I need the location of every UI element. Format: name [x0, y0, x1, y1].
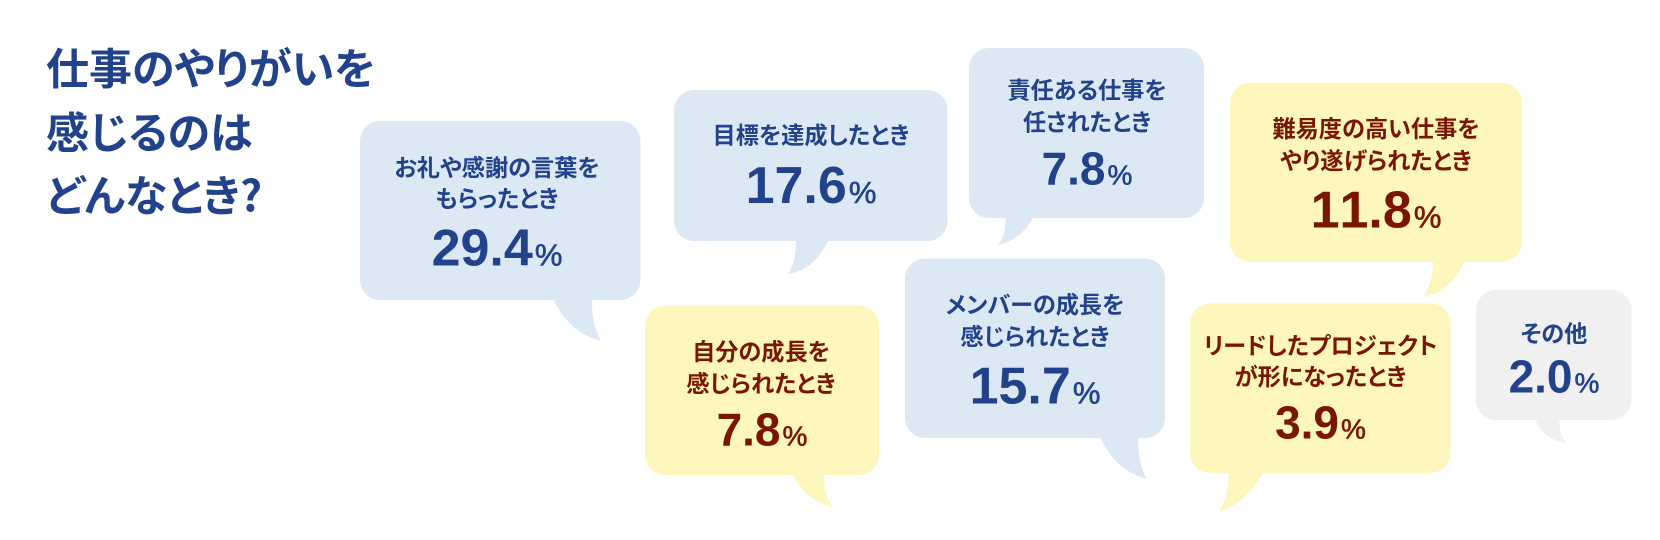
bubble: entrusted with responsibility 7.8%: 任されたとき [1023, 110, 1151, 136]
bubble: member growth 15.7% [905, 258, 1165, 479]
bubble: other 2.0% [1476, 290, 1632, 444]
bubble: thanks 29.4%: もらったとき [435, 186, 559, 212]
bubble: difficult work 11.8%: 難易度の高い仕事を [1272, 116, 1480, 142]
bubble: project took shape 3.9%: リードしたプロジェクト [1204, 333, 1437, 359]
title: どんなとき? [46, 162, 262, 224]
bubble: thanks 29.4%: 29.4% [432, 220, 562, 278]
bubble: project took shape 3.9%: が形になったとき [1235, 364, 1406, 390]
bubble: own growth 7.8% [645, 306, 879, 508]
bubble: entrusted with responsibility 7.8% [969, 48, 1204, 245]
bubble: other 2.0%: その他 [1521, 321, 1587, 347]
bubble: goal achieved 17.6% [674, 90, 948, 274]
bubble: member growth 15.7%: 15.7% [970, 358, 1100, 416]
bubble: entrusted with responsibility 7.8%: 7.8% [1042, 142, 1132, 194]
bubble: other 2.0%: 2.0% [1509, 350, 1599, 402]
bubble: thanks 29.4%: お礼や感謝の言葉を [394, 155, 600, 181]
title [46, 36, 375, 224]
bubble: entrusted with responsibility 7.8%: 責任ある仕事を [1007, 78, 1167, 104]
bubble: own growth 7.8%: 感じられたとき [686, 371, 836, 397]
bubble: goal achieved 17.6%: 目標を達成したとき [713, 122, 909, 148]
bubble: goal achieved 17.6%: 17.6% [746, 157, 876, 215]
bubble: own growth 7.8%: 7.8% [717, 404, 807, 456]
bubble: difficult work 11.8%: やり遂げられたとき [1280, 148, 1472, 174]
bubble: project took shape 3.9%: 3.9% [1275, 396, 1366, 448]
bubble: member growth 15.7%: 感じられたとき [960, 324, 1110, 350]
title: 感じるのは [46, 100, 252, 162]
bubble: difficult work 11.8%: 11.8% [1311, 182, 1441, 240]
bubble: own growth 7.8%: 自分の成長を [692, 339, 830, 365]
bubble: member growth 15.7%: メンバーの成長を [946, 292, 1124, 318]
title: 仕事のやりがいを [46, 36, 375, 98]
bubble: thanks 29.4% [360, 121, 640, 341]
bubble: project took shape 3.9% [1190, 304, 1450, 512]
bubble: difficult work 11.8% [1230, 83, 1522, 296]
